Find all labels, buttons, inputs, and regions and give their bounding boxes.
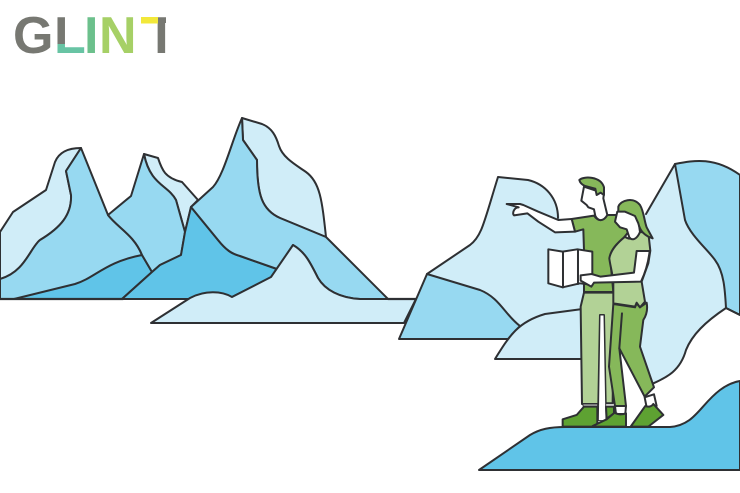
logo: GLINT: N [99,7,137,65]
logo: GLINT: L [54,7,86,65]
woman's arm [581,251,650,287]
mountain range: left peak [0,148,152,299]
woman's shoes [593,413,626,427]
man [507,178,630,427]
woman [581,200,663,427]
baseline [0,298,416,300]
mountain behind figures: right [630,161,740,384]
woman's shirt [609,232,650,307]
foreground blue hill [479,381,740,470]
woman's pants [609,303,654,406]
man's shirt [572,215,630,292]
woman's hair [618,200,653,238]
logo: GLINT: T [146,7,178,65]
mountain range: middle peak [108,154,277,299]
logo: GLINT: G [13,7,53,65]
man's hair [579,178,604,195]
man's shoes [563,407,597,427]
foreground snow ridge [151,245,416,323]
woman's head [615,208,640,239]
mountain behind figures: centre [399,177,600,359]
man's head [581,187,607,220]
logo: GLINT [15,16,166,54]
logo: GLINT: I [84,7,98,65]
woman's socks [615,406,626,414]
mountain range: tall peak [191,118,388,299]
figures: man and woman with map [507,178,663,427]
man's arm [507,204,575,232]
map [548,249,592,287]
man's pants [581,293,614,404]
